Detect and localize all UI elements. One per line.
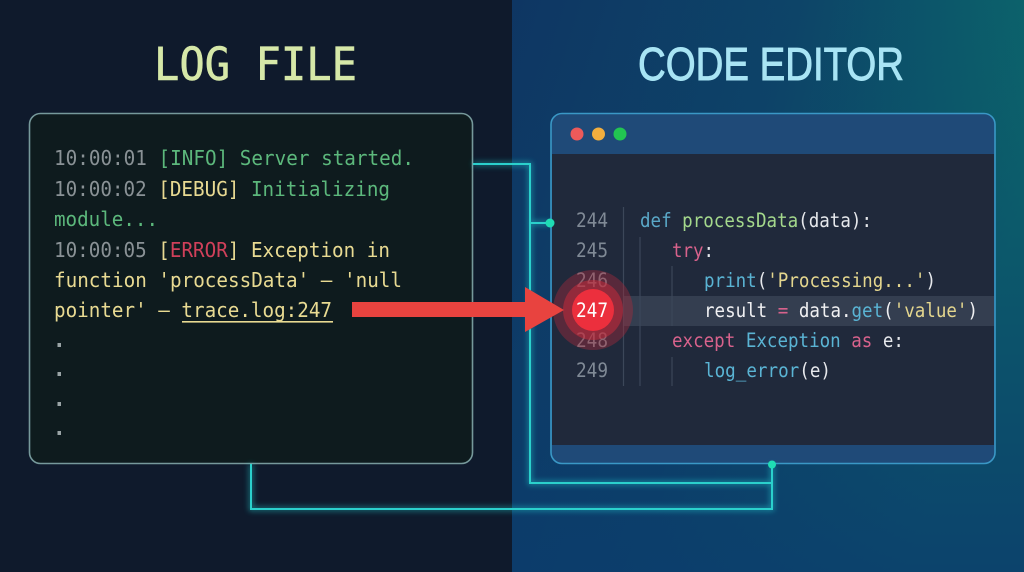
heading: log file: LOG FILE bbox=[154, 38, 357, 91]
arrow: log to line 247 bbox=[352, 287, 564, 332]
node: editor bottom bbox=[768, 460, 776, 468]
connector: branch to line 244 bbox=[530, 222, 550, 224]
window buttons bbox=[570, 128, 626, 140]
code line 248: except Exception as e: bbox=[672, 329, 904, 352]
code line 249: log_error(e) bbox=[704, 359, 831, 382]
editor body bbox=[552, 154, 994, 445]
line numbers: 245 bbox=[576, 239, 608, 262]
heading: code editor: CODE EDITOR bbox=[638, 38, 904, 90]
underline: trace reference bbox=[182, 321, 333, 323]
marker: line 247: 247 bbox=[576, 299, 608, 322]
indent guides bbox=[624, 207, 672, 386]
panel: log file bbox=[30, 114, 472, 464]
line numbers: 246 bbox=[576, 269, 608, 292]
code line 245: try: bbox=[672, 239, 714, 262]
left background bbox=[0, 0, 512, 572]
code line 244: def processData(data): bbox=[640, 209, 872, 232]
log line 4: 10:00:05 [ERROR] Exception in bbox=[54, 238, 390, 262]
connector: log file bottom to editor bottom bbox=[251, 464, 772, 509]
line numbers bbox=[576, 209, 608, 382]
node: line 244 bbox=[546, 218, 554, 228]
code line 247: result = data.get('value') bbox=[704, 299, 978, 322]
line numbers: 249 bbox=[576, 359, 608, 382]
log line 3: module... bbox=[54, 207, 158, 231]
log line 6: pointer' – trace.log:247 bbox=[54, 298, 332, 322]
right background bbox=[512, 0, 1024, 572]
log line 5: function 'processData' – 'null bbox=[54, 268, 402, 292]
log line 1: 10:00:01 [INFO] Server started. bbox=[54, 146, 414, 170]
connector glow bbox=[251, 164, 772, 509]
marker: line 247 bbox=[553, 270, 633, 350]
line numbers: 248 bbox=[576, 329, 608, 352]
panel: code editor bbox=[551, 114, 995, 464]
highlighted line bbox=[624, 296, 994, 326]
log line 2: 10:00:02 [DEBUG] Initializing bbox=[54, 177, 390, 201]
ellipsis dots bbox=[58, 343, 61, 435]
line numbers: 244 bbox=[576, 209, 608, 232]
code line 246: print('Processing...') bbox=[704, 269, 936, 292]
connector: log file to editor top bbox=[473, 164, 772, 483]
